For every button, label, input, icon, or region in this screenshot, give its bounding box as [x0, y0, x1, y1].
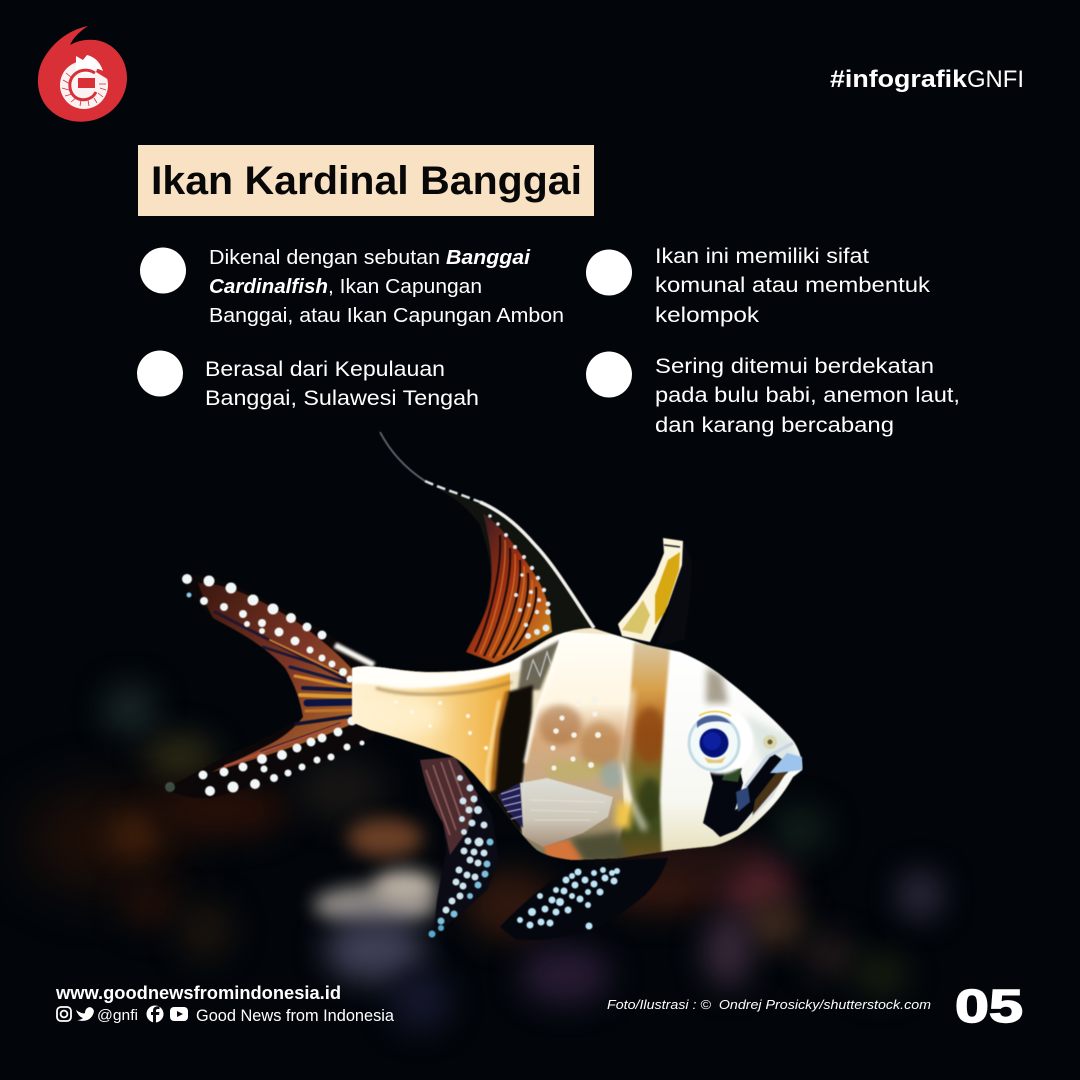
logo	[38, 26, 127, 122]
bullet text: Sering ditemui berdekatan	[655, 354, 934, 378]
icon: youtube	[170, 1007, 188, 1021]
bullet text: Berasal dari Kepulauan	[205, 357, 445, 381]
ventral fin	[500, 858, 668, 940]
photo credit: Foto/Ilustrasi : © Ondrej Prosicky/shutterstock.com	[607, 997, 931, 1012]
bullet text: kelompok	[655, 303, 759, 327]
bullet text: Banggai, Sulawesi Tengah	[205, 386, 479, 410]
anal fin dots	[428, 775, 494, 938]
ventral fin dots	[517, 867, 620, 930]
page number: 05	[955, 980, 1023, 1032]
title banner	[138, 145, 594, 216]
bullet: komunal	[586, 244, 930, 327]
icon: twitter	[76, 1007, 94, 1021]
bullet icon	[140, 248, 186, 294]
bullet: habitat	[586, 352, 960, 437]
first dorsal fin	[380, 432, 594, 664]
tail dots	[165, 574, 364, 796]
bullet text: Dikenal dengan sebutan	[209, 246, 440, 269]
fish body	[340, 620, 810, 870]
tail fin	[165, 574, 375, 798]
logo garuda G	[60, 55, 112, 109]
second dorsal fin	[618, 538, 692, 648]
handle: @gnfi	[97, 1007, 138, 1024]
bullet text: , Ikan Capungan	[328, 275, 482, 298]
blurred reef background	[25, 684, 942, 1030]
bullet: asal	[137, 350, 479, 410]
channel name: Good News from Indonesia	[196, 1006, 395, 1025]
bullet text: komunal atau membentuk	[655, 273, 930, 297]
lace patch	[518, 640, 560, 690]
bullet icon	[137, 350, 183, 396]
pectoral fin	[498, 778, 613, 847]
bullet text	[655, 244, 930, 327]
hashtag: GNFI	[967, 66, 1024, 93]
icon: instagram	[57, 1007, 71, 1021]
footer website: www.goodnewsfromindonesia.id	[55, 982, 341, 1003]
bullet text: Banggai	[446, 246, 531, 269]
orange patch under fin	[543, 840, 585, 864]
bullet text	[205, 357, 479, 410]
bullet text: dan karang bercabang	[655, 413, 894, 437]
bullet text: Cardinalfish	[209, 275, 328, 298]
face and mouth	[702, 735, 802, 837]
footer social row	[57, 1006, 395, 1025]
title banner: Ikan Kardinal Banggai	[151, 159, 582, 203]
hashtag	[830, 66, 1024, 93]
bullet: nama lain	[140, 246, 564, 327]
fish eye	[687, 708, 753, 774]
anal fin	[420, 757, 499, 938]
bullet text	[655, 354, 960, 437]
bullet text: Banggai, atau Ikan Capungan Ambon	[209, 304, 564, 327]
bullet text: pada bulu babi, anemon laut,	[655, 383, 960, 407]
hashtag: #infografik	[830, 66, 968, 93]
icon: facebook	[146, 1006, 164, 1023]
fish illustration	[165, 432, 810, 940]
tail-side dark band	[488, 684, 535, 836]
mid body band	[524, 632, 640, 870]
bullet text	[209, 246, 564, 327]
brown band	[612, 642, 672, 860]
logo badge	[38, 26, 127, 122]
bullet text: Ikan ini memiliki sifat	[655, 244, 869, 268]
head white band	[660, 648, 805, 858]
bullet icon	[586, 352, 632, 398]
bullet icon	[586, 250, 632, 296]
